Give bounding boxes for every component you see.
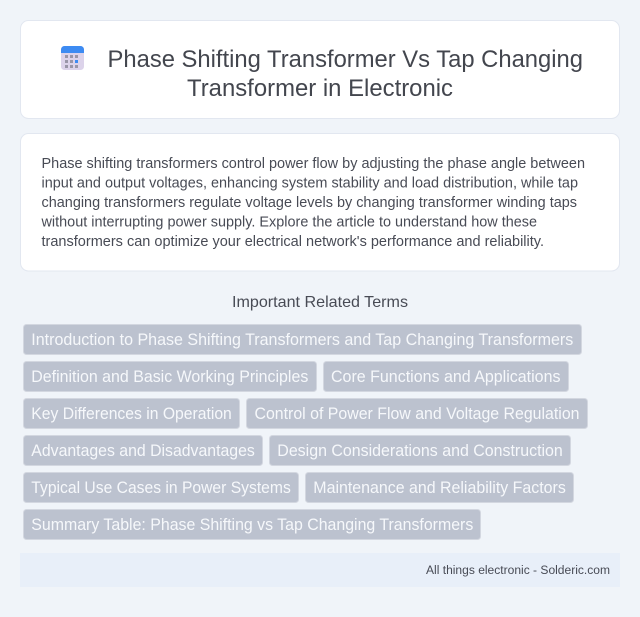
tag: definition: Definition and Basic Working Principles <box>31 368 308 386</box>
heading: important related terms: Important Related Terms <box>232 294 408 311</box>
tag: control of power flow <box>246 398 588 428</box>
tag: advantages <box>24 436 262 466</box>
tag list <box>24 324 588 540</box>
tag: definition <box>24 362 316 392</box>
text block: summary: transformers can optimize your electrical network's performance and reliability. <box>42 234 544 250</box>
title <box>108 46 583 102</box>
tag: key differences: Key Differences in Operation <box>31 405 232 423</box>
icon: calendar <box>61 46 84 70</box>
panel: title card <box>20 20 620 118</box>
footer <box>20 553 620 587</box>
tag: key differences <box>24 398 240 428</box>
tag: typical use cases: Typical Use Cases in Power Systems <box>31 479 291 497</box>
footer: All things electronic - Solderic.com <box>426 563 610 577</box>
tag: introduction: Introduction to Phase Shifting Transformers and Tap Changing Transformers <box>31 331 573 349</box>
title: Transformer in Electronic <box>187 75 453 102</box>
tag: maintenance: Maintenance and Reliability Factors <box>313 479 566 497</box>
tag: core functions: Core Functions and Applications <box>331 368 560 386</box>
tag: advantages: Advantages and Disadvantages <box>31 442 255 460</box>
text block: summary <box>41 156 585 250</box>
text block: summary: changing transformers regulate voltage levels by changing transformer winding taps <box>42 195 577 211</box>
text block: summary: Phase shifting transformers control power flow by adjusting the phase angle between <box>42 156 585 172</box>
tag: core functions <box>324 362 568 392</box>
tag: design considerations <box>270 436 570 466</box>
tag: typical use cases <box>24 472 298 502</box>
text block: summary: without interrupting power supply. Explore the article to understand how these <box>41 214 537 230</box>
panel: summary paragraph <box>20 134 620 271</box>
tag: design considerations: Design Considerations and Construction <box>277 442 563 460</box>
tag: maintenance <box>306 472 574 502</box>
title: Phase Shifting Transformer Vs Tap Changing <box>108 46 583 73</box>
tag: summary table <box>24 510 480 540</box>
tag: summary table: Summary Table: Phase Shifting vs Tap Changing Transformers <box>31 516 473 534</box>
tag: introduction <box>24 324 582 354</box>
tag: control of power flow: Control of Power Flow and Voltage Regulation <box>254 405 580 423</box>
text block: summary: input and output voltages, enhancing system stability and load distribution, while tap <box>42 176 578 192</box>
